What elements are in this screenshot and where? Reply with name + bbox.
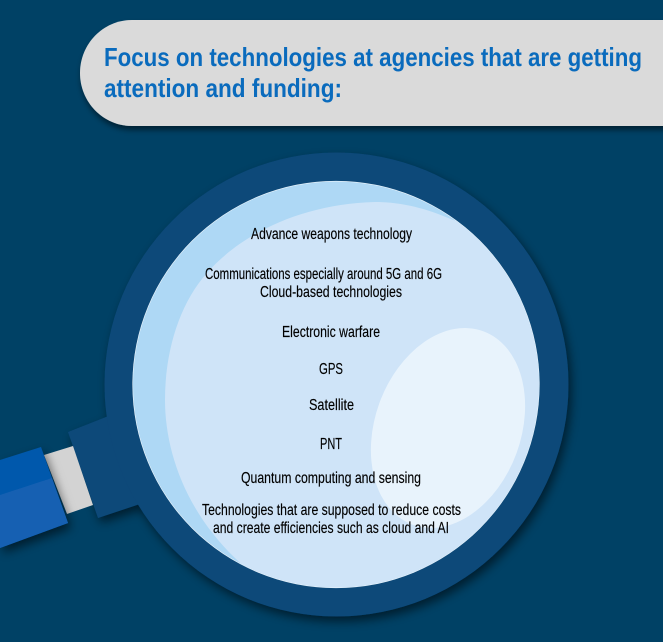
lens highlight: [165, 202, 539, 588]
item: quantum: Quantum computing and sensing: [241, 470, 421, 487]
list of technologies: [202, 226, 461, 537]
item: satellite: Satellite: [309, 397, 354, 414]
item: cloud: Cloud-based technologies: [260, 284, 402, 301]
handle: [0, 447, 68, 548]
magnifier frame and neck: [68, 152, 568, 616]
lens: [132, 180, 540, 588]
item: cost reduction: and create efficiencies such as cloud and AI: [213, 520, 449, 537]
title: attention and funding:: [104, 73, 342, 103]
item: weapons: Advance weapons technology: [251, 226, 412, 243]
lens glare: [344, 306, 552, 550]
item: cost reduction: Technologies that are supposed to reduce costs: [202, 502, 461, 519]
item: electronic warfare: Electronic warfare: [282, 324, 380, 341]
item: communications: Communications especially around 5G and 6G: [205, 266, 442, 283]
magnifying glass: [0, 152, 600, 620]
grey handle collar: [44, 446, 93, 514]
header banner: [80, 20, 663, 126]
item: PNT: PNT: [320, 436, 342, 453]
item: GPS: GPS: [319, 361, 343, 378]
